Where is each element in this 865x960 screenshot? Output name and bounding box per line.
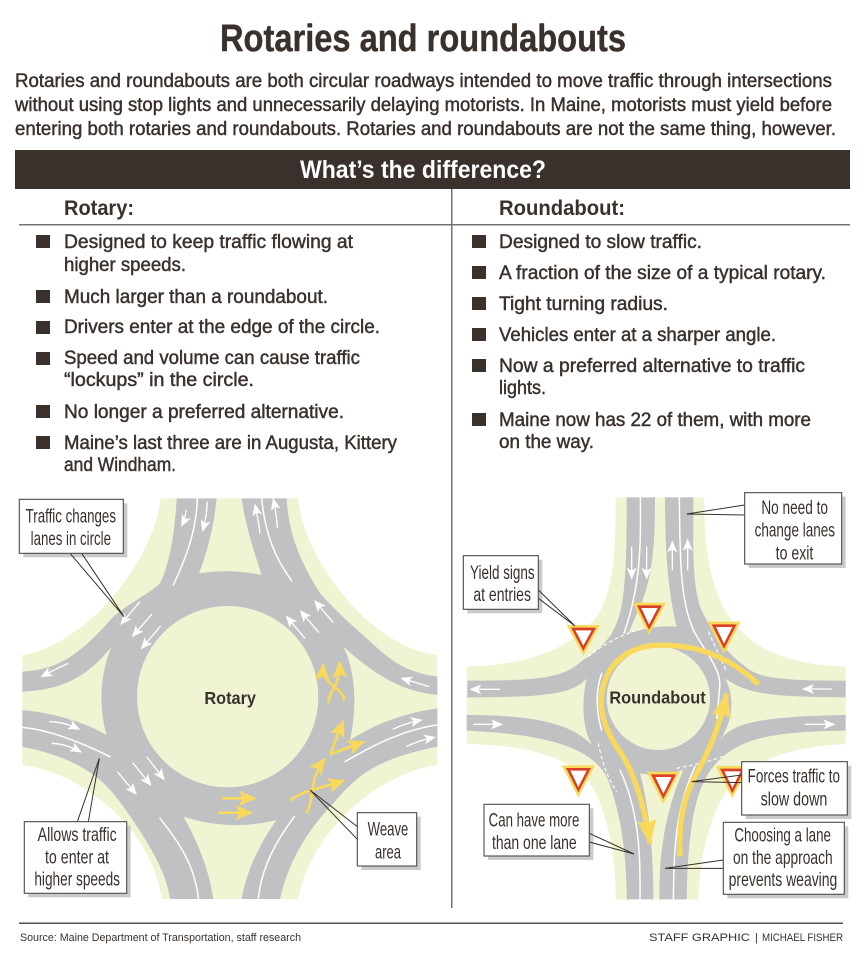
callout: more than one lane: than one lane	[492, 833, 577, 854]
rotary road surface	[22, 498, 437, 899]
heading: roundabout: Roundabout:	[499, 197, 625, 220]
callout: choosing a lane	[665, 822, 848, 898]
text: rotary points: No longer a preferred alternative.	[64, 402, 344, 423]
roundabout ground	[467, 497, 846, 899]
intro text: without using stop lights and unnecessarily delaying motorists. In Maine, motorists must yield before	[14, 95, 832, 116]
label: roundabout: Roundabout	[609, 688, 706, 708]
callout: more than one lane: Can have more	[489, 811, 579, 832]
section banner	[15, 150, 850, 189]
roundabout white traffic arrows	[471, 540, 834, 724]
intro text: Rotaries and roundabouts are both circular roadways intended to move traffic through intersections	[15, 71, 832, 92]
rotary yellow weave arrows	[218, 662, 364, 813]
callout: yield signs at entries: at entries	[473, 585, 531, 606]
text: rotary points: Drivers enter at the edge of the circle.	[64, 317, 380, 338]
text: roundabout points: on the way.	[499, 432, 594, 453]
rotary center island	[137, 606, 318, 787]
credit: MICHAEL FISHER	[762, 932, 843, 944]
diagram: roundabout	[463, 493, 851, 899]
callout: yield signs at entries	[463, 556, 575, 626]
bullets: rotary	[36, 235, 50, 449]
title: Rotaries and roundabouts	[220, 18, 626, 60]
rotary lane lines	[22, 498, 437, 898]
callout: yield signs at entries: Yield signs	[470, 563, 535, 584]
text: roundabout points: Now a preferred alternative to traffic	[499, 356, 805, 377]
callout: traffic changes lanes: Traffic changes	[26, 507, 116, 528]
text: rotary points: and Windham.	[64, 455, 176, 476]
source: Source: Maine Department of Transportation, staff research	[20, 932, 301, 944]
panel: roundabout list	[472, 197, 826, 453]
callout: weave area: Weave	[368, 820, 408, 841]
callout: forces traffic to slow down	[692, 762, 851, 819]
roundabout center island	[607, 647, 710, 750]
text: rotary points: “lockups” in the circle.	[64, 370, 254, 391]
text: roundabout points: Designed to slow traffic.	[499, 232, 702, 253]
callout: allows traffic to enter	[24, 758, 131, 897]
callout: traffic changes lanes: lanes in circle	[31, 529, 111, 550]
yield signs	[562, 603, 749, 804]
text: rotary points: Designed to keep traffic flowing at	[64, 232, 354, 253]
credit: STAFF GRAPHIC	[649, 932, 750, 944]
text: roundabout points: Tight turning radius.	[499, 294, 668, 315]
rotary white traffic arrows	[42, 499, 435, 794]
section banner: What’s the difference?	[300, 156, 546, 184]
text: roundabout points: Maine now has 22 of them, with more	[499, 410, 811, 431]
text: rotary points: Speed and volume can cause traffic	[64, 348, 360, 369]
roundabout road surface	[467, 497, 846, 899]
text: rotary points: Much larger than a roundabout.	[64, 287, 328, 308]
callout: allows traffic to enter: higher speeds	[34, 870, 120, 891]
rotary ground	[22, 498, 437, 899]
roundabout lane lines	[588, 497, 727, 899]
footer	[19, 922, 843, 944]
diagram: rotary	[19, 498, 437, 899]
heading: rotary: Rotary:	[64, 197, 134, 220]
text: rotary points: higher speeds.	[64, 255, 186, 276]
callout: allows traffic to enter: to enter at	[45, 847, 109, 868]
panel: rotary list	[36, 197, 397, 476]
intro text: entering both rotaries and roundabouts. Rotaries and roundabouts are not the same thing, however.	[15, 119, 836, 140]
callout: no need to change lanes	[687, 493, 846, 568]
column divider and header rule	[19, 189, 850, 908]
bullets: roundabout	[472, 235, 486, 426]
callout: weave area	[310, 790, 421, 870]
callout: no need to change lanes: No need to	[761, 498, 828, 519]
intro text	[14, 71, 836, 140]
callout: more than one lane	[484, 804, 634, 860]
credit	[649, 932, 843, 944]
callout: no need to change lanes: to exit	[776, 543, 814, 564]
text: rotary points: Maine’s last three are in Augusta, Kittery	[64, 433, 397, 454]
roundabout yellow traffic paths	[601, 645, 758, 857]
callout: allows traffic to enter: Allows traffic	[38, 825, 117, 846]
credit: |	[755, 932, 758, 944]
text: roundabout points: Vehicles enter at a sharper angle.	[499, 325, 776, 346]
text: rotary points	[64, 232, 397, 476]
callout: weave area: area	[375, 842, 401, 863]
text: roundabout points: lights.	[499, 378, 546, 399]
label: rotary: Rotary	[204, 688, 256, 708]
callout: traffic changes lanes	[19, 499, 127, 617]
callout: forces traffic to slow down: slow down	[761, 789, 827, 810]
text: roundabout points	[499, 232, 826, 453]
text: roundabout points: A fraction of the size of a typical rotary.	[499, 263, 826, 284]
